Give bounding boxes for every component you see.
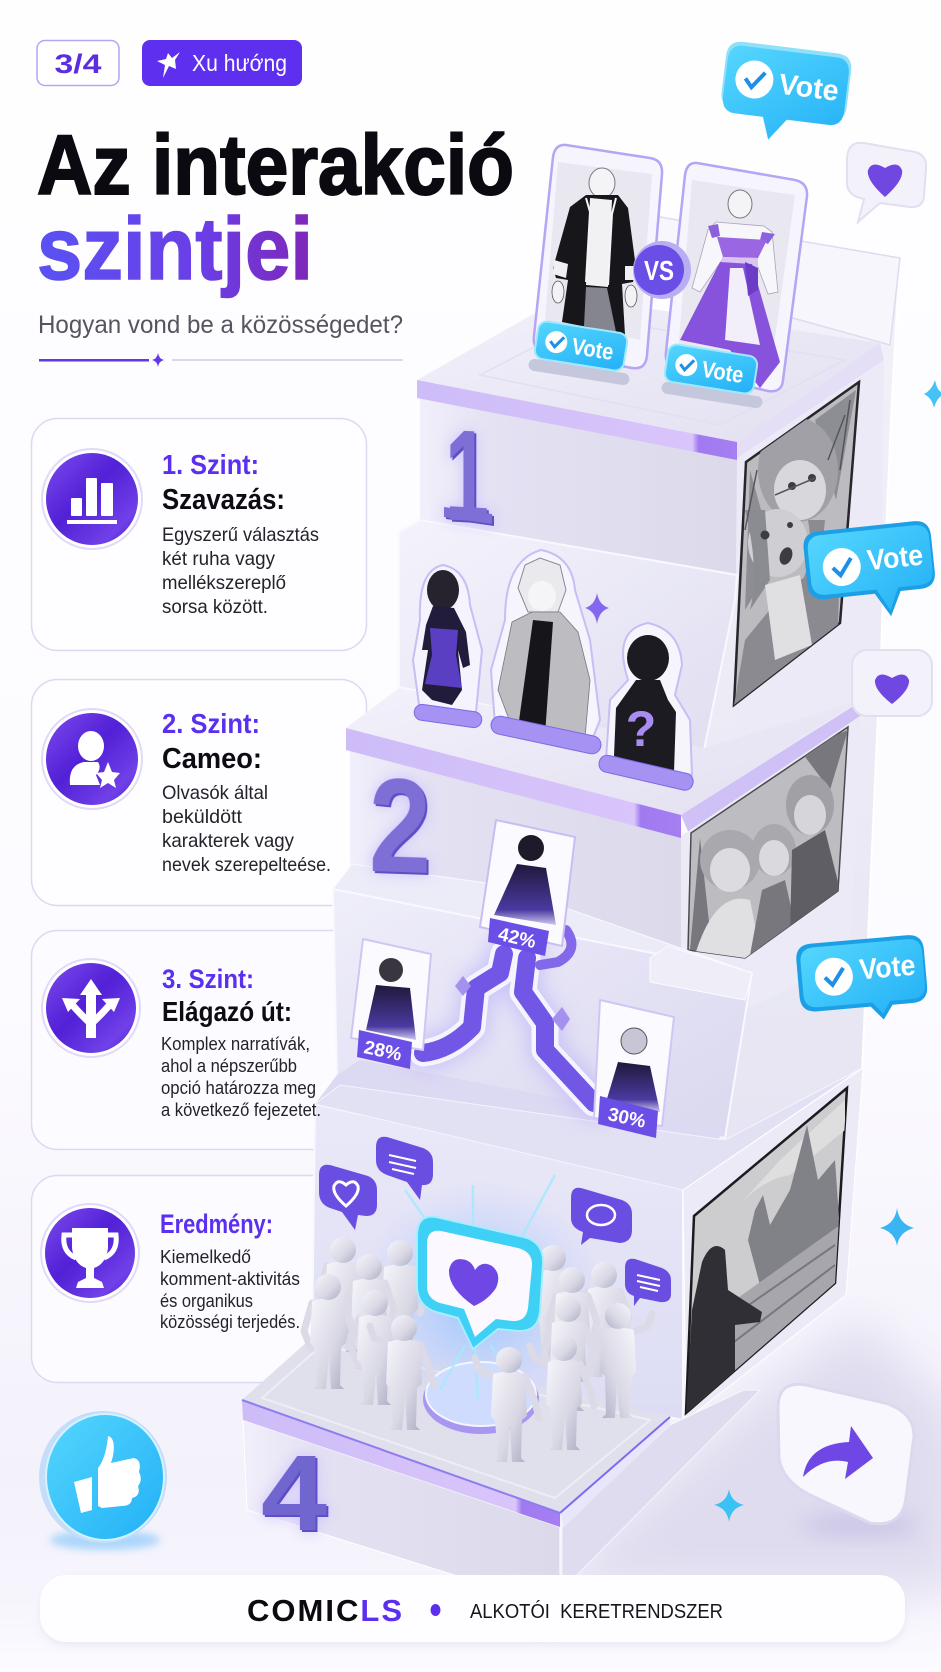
text: level 1 [162,449,319,618]
number 2: 2 [369,751,431,902]
card 28 percent: 28% [362,1037,404,1066]
text: level 3: a következő fejezetet. [161,1100,321,1120]
text: level 3: ahol a népszerűbb [161,1056,297,1076]
text: level 3: Komplex narratívák, [161,1034,310,1054]
subtitle: Hogyan vond be a közösségedet? [38,311,403,339]
text: result: és organikus [160,1291,253,1311]
number 4: 4 [261,1432,327,1553]
vote bubble top [717,40,853,149]
text: level 1: 1. Szint: [162,449,259,480]
heart tile middle [852,650,932,716]
icon: chat comment bubble [571,1188,632,1245]
text: level 2: Cameo: [162,743,262,775]
text: result: Kiemelkedő [160,1247,251,1267]
level 2 glass wall [399,520,737,750]
outer glass column [660,217,900,1195]
glowing pedestal [355,1175,605,1434]
card: purple dress [666,163,807,391]
text: level 2 [162,708,331,876]
voting cards with outfits [528,145,807,409]
panel: level 1 card [32,418,366,650]
manga panel: level 4 castle [686,1088,847,1415]
level 1 platform [417,217,900,770]
text: level 2: 2. Szint: [162,708,260,739]
title: Az interakció [37,118,514,212]
card 30 percent [594,1000,674,1138]
level 4 glass box [312,1068,863,1420]
level 4 base platform [242,1333,760,1580]
vote bubble lower: Vote [858,950,917,986]
text: level 3: Elágazó út: [162,996,292,1027]
level 2 platform [346,688,860,1040]
vote label left [528,320,630,386]
title: szintjei [37,199,313,298]
vote bubble top: Vote [777,69,840,108]
card: black coat [534,145,662,368]
tag: trending: Xu hướng [192,50,287,76]
icon: cyan sparkle right [880,1208,914,1246]
text: level 1: sorsa között. [162,596,268,618]
separator dot [430,1604,440,1616]
card 28 percent [351,939,431,1069]
icon: trophy circle [41,1204,139,1302]
heart tile top [847,143,926,222]
vote bubble lower [795,934,930,1027]
footer bar [40,1575,905,1646]
text: level 2: Olvasók által [162,782,268,804]
standee: mystery silhouette: ? [626,701,656,757]
crowd back [319,1237,629,1382]
text: result: komment-aktivitás [160,1269,300,1289]
text: level 1: Egyszerű választás [162,524,319,546]
tagline: ALKOTÓI KERETRENDSZER [470,1600,723,1623]
path node left [455,976,471,996]
icon: cyan sparkle bottom [714,1489,744,1522]
icon: lines comment bubble [376,1137,433,1200]
crowd front [304,1274,652,1462]
floor shadow [540,1320,941,1590]
vs badge: VS [644,255,674,286]
acrylic standees [413,550,695,792]
manga panel: level 2 [688,727,848,960]
poll cards [351,820,674,1138]
text: result [160,1209,300,1332]
panel: result card [32,1176,366,1382]
text: level 1: Szavazás: [162,484,285,516]
icon: branching arrows circle [42,959,140,1057]
path node right [552,1007,570,1031]
card 42 percent: 42% [496,924,538,953]
vs badge [633,241,691,299]
standee: mystery silhouette [597,623,695,792]
manga panel: level 1 [734,382,859,705]
standee: white-haired boy [489,550,603,755]
text: result: közösségi terjedés. [160,1312,300,1332]
panel: level 3 card [32,930,366,1150]
text: level 2: nevek szerepelteése. [162,854,331,876]
icon: share tile [778,1384,920,1537]
standee: silhouette girl [413,565,483,729]
icon: heart comment bubble [319,1165,377,1230]
text: level 3 [161,964,321,1120]
text: level 3: 3. Szint: [162,964,254,994]
isometric tower [242,217,900,1580]
text: level 2: karakterek vagy [162,830,294,852]
icon: person star circle [42,709,142,809]
divider [39,353,403,367]
icon: purple sparkle [585,593,609,624]
vote bubble middle [802,520,939,624]
number 1 [444,401,492,550]
vote bubble middle: Vote [866,540,925,577]
title [37,118,514,298]
tag: trending [142,40,302,86]
icon: small lines bubble [625,1259,671,1306]
number 1: 1 [445,401,489,550]
brand logo: COMICLS [247,1593,402,1628]
vote label left: Vote [570,333,615,365]
level 3 glass box [315,864,752,1190]
icon: bar chart circle [42,449,142,549]
icon: thumbs up circle [39,1411,167,1550]
panel: level 2 card [32,680,366,906]
card 30 percent: 30% [606,1104,648,1133]
tag: page counter [37,40,119,86]
vote label right: Vote [700,356,745,388]
branching path [423,930,594,1103]
text: result: Eredmény: [160,1209,273,1239]
card 42 percent [480,820,575,956]
text: level 3: opció határozza meg [161,1078,316,1098]
icon: cyan sparkle cutoff [924,380,941,408]
tag: page counter: 3/4 [54,49,102,79]
central heart bubble [417,1217,543,1349]
text: level 2: beküldött [162,806,243,828]
text: level 1: két ruha vagy [162,548,275,570]
vote label right [661,343,763,409]
text: level 1: mellékszereplő [162,572,286,594]
